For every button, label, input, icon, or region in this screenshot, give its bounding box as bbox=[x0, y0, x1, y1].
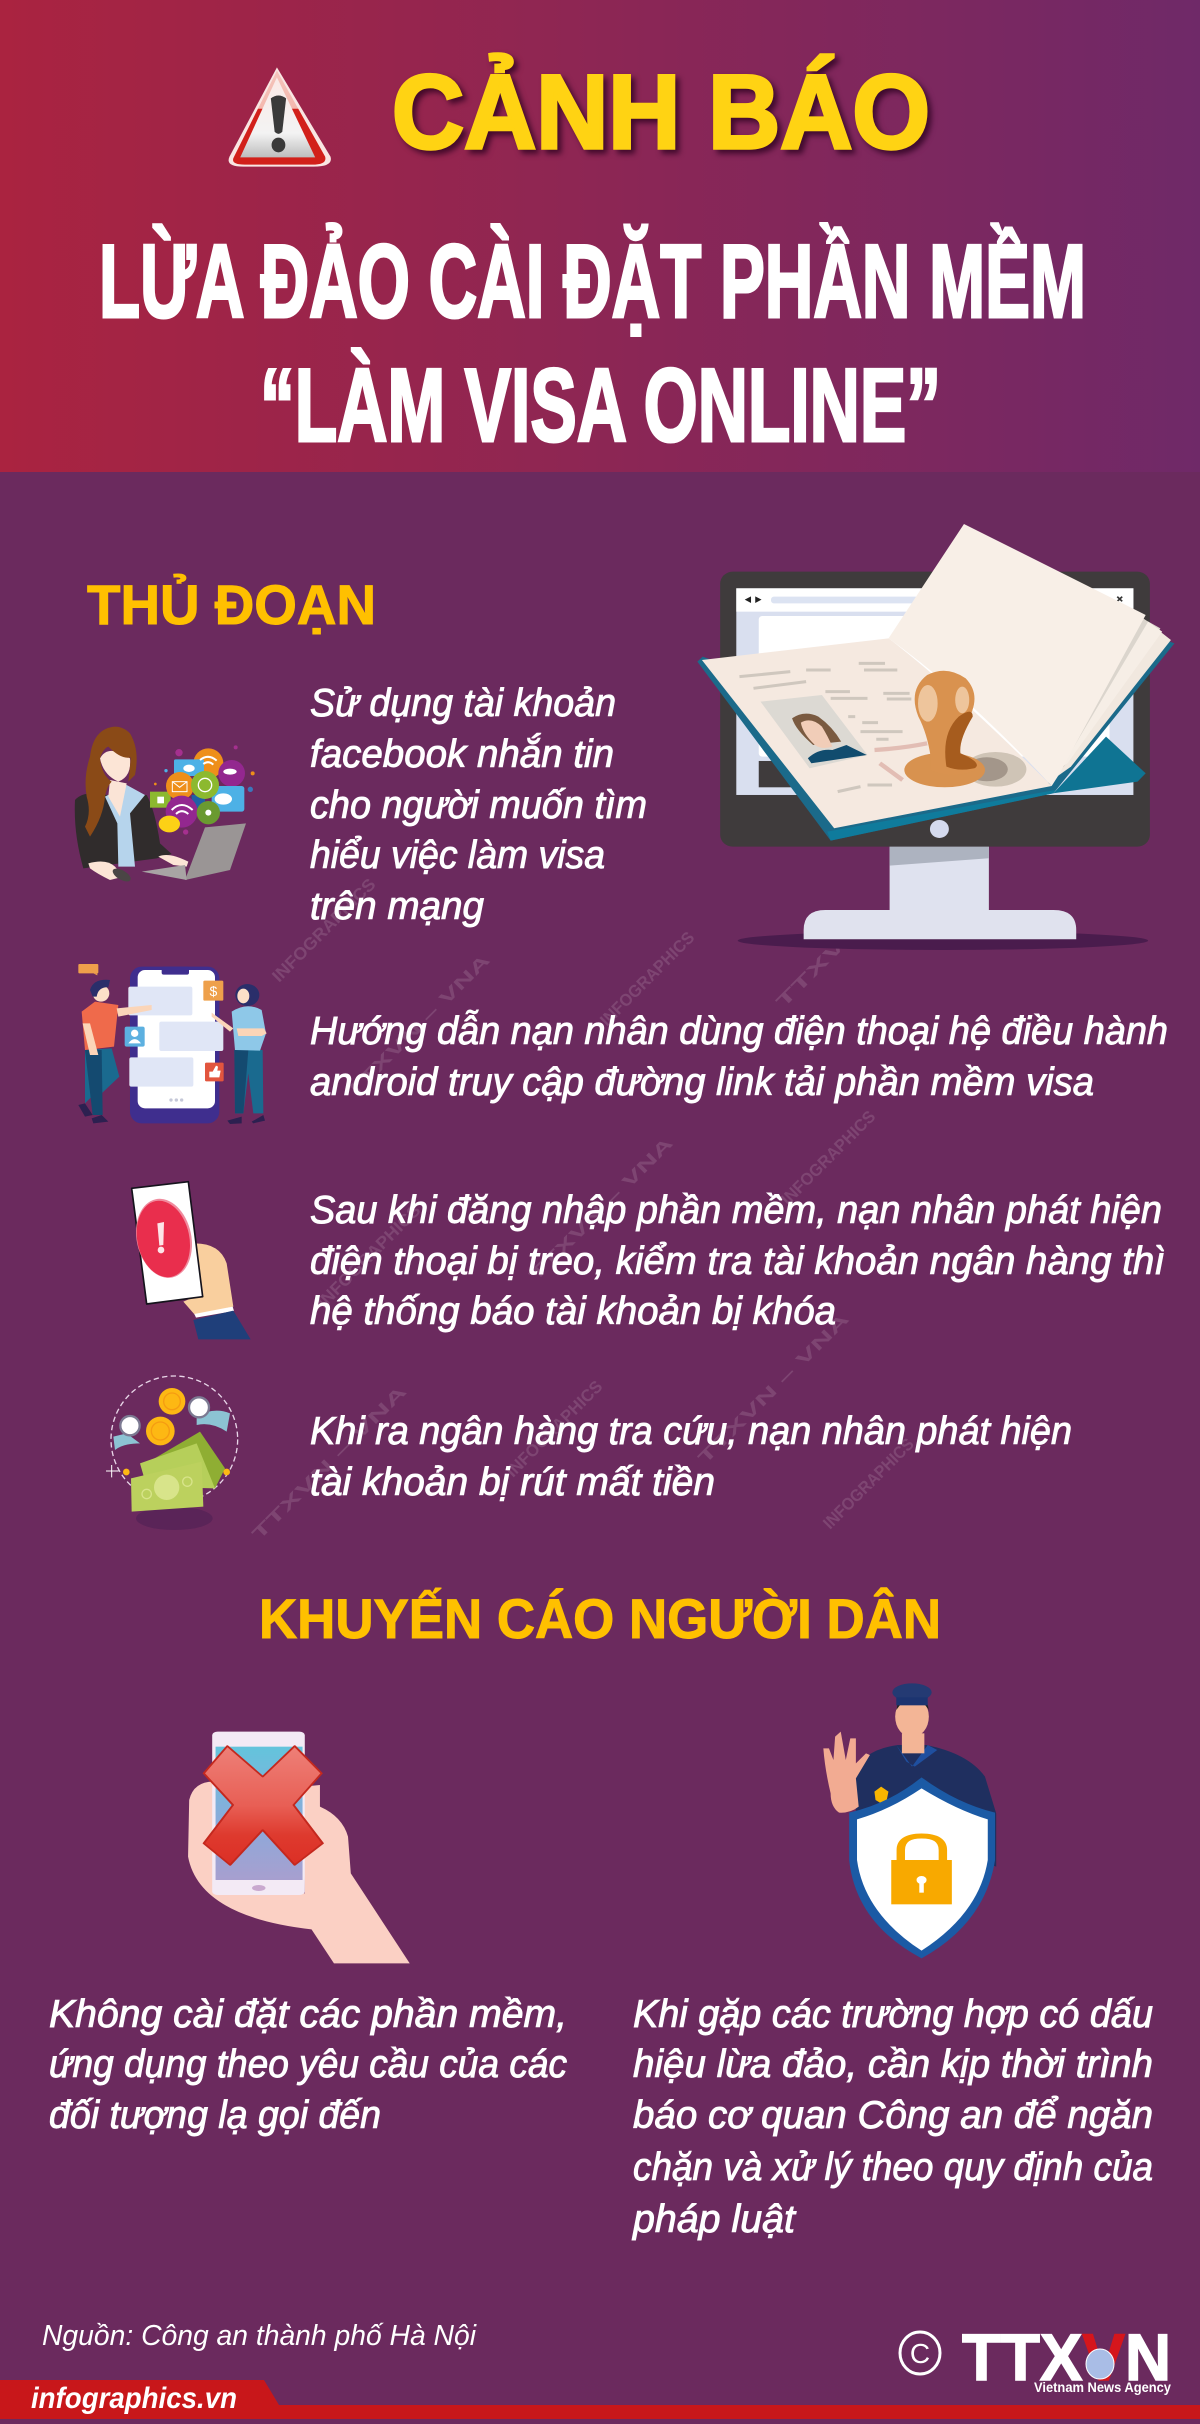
watermarks: TTXVN – VNA bbox=[694, 1309, 853, 1468]
icon: copyright: C bbox=[910, 2338, 930, 2369]
icon: policeman with shield bbox=[823, 1683, 996, 1958]
watermarks: INFOGRAPHICS bbox=[777, 1107, 879, 1209]
text: step 3: Sau khi đăng nhập phần mềm, nạn nhân phát hiện bbox=[310, 1189, 1162, 1232]
text: advice two: báo cơ quan Công an để ngăn bbox=[633, 2094, 1153, 2137]
step 4: money lost bbox=[106, 1376, 1072, 1530]
watermarks: TTXVN bbox=[772, 917, 867, 1012]
watermarks bbox=[248, 875, 918, 1544]
heading: advice: KHUYẾN CÁO NGƯỜI DÂN bbox=[259, 1587, 941, 1650]
watermarks: INFOGRAPHICS bbox=[596, 928, 698, 1030]
text: step 3 bbox=[310, 1189, 1165, 1333]
icon: warning triangle bbox=[229, 67, 331, 167]
heading: methods: THỦ ĐOẠN bbox=[87, 573, 376, 636]
step 2: download link bbox=[78, 964, 1168, 1124]
title: warning: CẢNH BÁO bbox=[392, 52, 930, 171]
text: advice two: hiệu lừa đảo, cần kịp thời trình bbox=[633, 2043, 1153, 2086]
text: step 1: cho người muốn tìm bbox=[310, 784, 647, 827]
text: step 2: Hướng dẫn nạn nhân dùng điện thoại hệ điều hành bbox=[310, 1010, 1168, 1053]
illustration: monitor with passport and stamp bbox=[697, 524, 1174, 950]
icon: two people with phone: $ bbox=[209, 983, 217, 999]
watermarks: INFOGRAPHICS bbox=[819, 1435, 918, 1533]
icon: hand with phone and red cross bbox=[188, 1732, 410, 1963]
text: step 1: facebook nhắn tin bbox=[310, 733, 614, 776]
text: step 2: android truy cập đường link tải phần mềm visa bbox=[310, 1061, 1094, 1104]
text: step 1: Sử dụng tài khoản bbox=[310, 682, 616, 725]
text: advice one bbox=[49, 1993, 567, 2137]
text: advice two: Khi gặp các trường hợp có dấu bbox=[633, 1993, 1153, 2036]
text: advice two: pháp luật bbox=[632, 2198, 797, 2241]
text: step 3: hệ thống báo tài khoản bị khóa bbox=[310, 1290, 836, 1333]
source note: Nguồn: Công an thành phố Hà Nội bbox=[42, 2320, 478, 2352]
icon: two people with phone bbox=[78, 964, 267, 1124]
text: step 1: hiểu việc làm visa bbox=[310, 834, 605, 877]
icon: money and coins bbox=[106, 1376, 238, 1530]
step 1: social media bbox=[75, 682, 647, 928]
panel: advice two bbox=[632, 1683, 1153, 2241]
text: advice two: chặn và xử lý theo quy định của bbox=[633, 2146, 1153, 2189]
text: step 4: Khi ra ngân hàng tra cứu, nạn nhân phát hiện bbox=[310, 1410, 1072, 1453]
watermarks: TTXVN – VNA bbox=[342, 951, 494, 1102]
icon: woman at laptop with social icons bbox=[75, 727, 255, 884]
watermarks: TTXVN – VNA bbox=[525, 1134, 677, 1285]
text: step 4 bbox=[310, 1410, 1072, 1504]
watermarks: INFOGRAPHICS bbox=[313, 1201, 424, 1312]
text: advice one: ứng dụng theo yêu cầu của các bbox=[49, 2043, 567, 2086]
text: step 1: trên mạng bbox=[310, 885, 484, 928]
step 3: phone frozen bbox=[129, 1182, 1165, 1339]
text: advice one: Không cài đặt các phần mềm, bbox=[49, 1993, 567, 2036]
footer logo: TTXVN: TTXVN bbox=[962, 2320, 1171, 2394]
icon: hand holding phone with alert bbox=[129, 1182, 251, 1339]
text: advice one: đối tượng lạ gọi đến bbox=[49, 2094, 381, 2137]
header band bbox=[0, 0, 1200, 472]
watermarks: INFOGRAPHICS bbox=[502, 1377, 606, 1481]
icon: copyright bbox=[900, 2332, 940, 2374]
text: advice two bbox=[632, 1993, 1153, 2241]
text: step 1 bbox=[310, 682, 647, 928]
watermarks: TTXVN – VNA bbox=[248, 1382, 410, 1544]
text: step 2 bbox=[310, 1010, 1168, 1104]
text: step 3: điện thoại bị treo, kiểm tra tài khoản ngân hàng thì bbox=[310, 1240, 1165, 1283]
text: step 4: tài khoản bị rút mất tiền bbox=[310, 1461, 715, 1504]
footer bar and website tab bbox=[0, 2380, 1200, 2419]
panel: advice one bbox=[49, 1732, 567, 2137]
watermarks: INFOGRAPHICS bbox=[268, 875, 379, 986]
footer logo: TTXVN: Vietnam News Agency bbox=[1034, 2379, 1171, 2395]
footer bar and website tab: infographics.vn bbox=[31, 2382, 237, 2415]
